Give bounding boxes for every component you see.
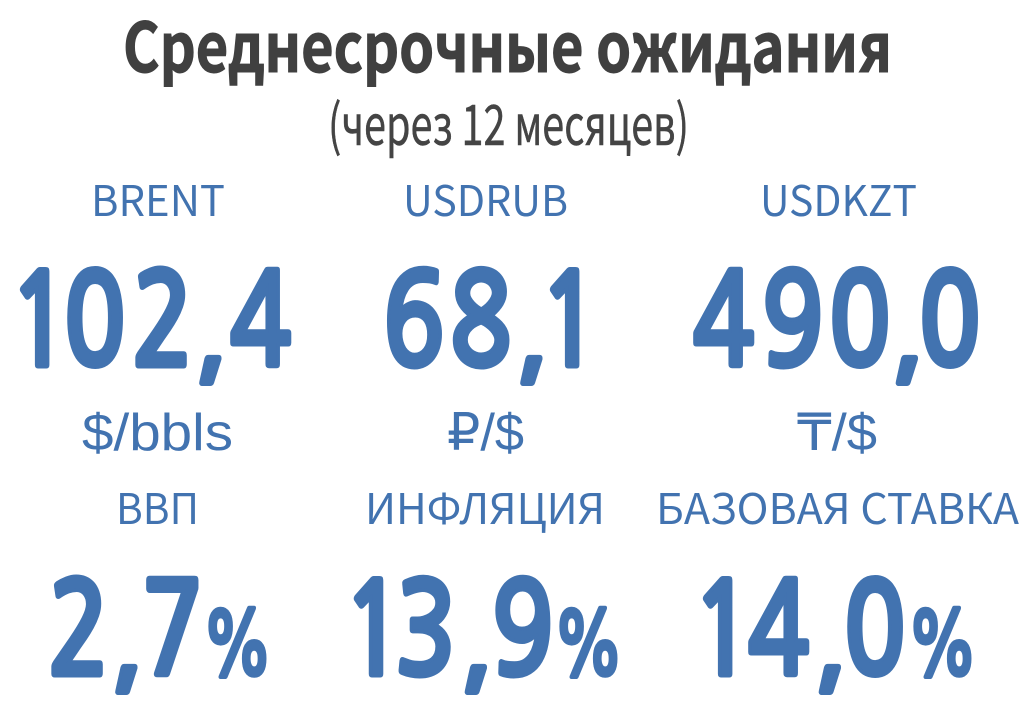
panel: ВВП <box>47 476 273 695</box>
label: ИНФЛЯЦИЯ: ИНФЛЯЦИЯ <box>365 476 605 537</box>
value: 14,0: 14,0 <box>691 569 907 695</box>
subtitle: (через 12 месяцев) <box>328 81 689 162</box>
percent sign: % <box>907 602 978 690</box>
label: USDRUB: USDRUB <box>403 168 568 229</box>
value: 13,9: 13,9 <box>342 569 555 695</box>
panel: USDKZT <box>692 168 982 462</box>
value: 68,1: 68,1 <box>382 260 602 386</box>
panel: ИНФЛЯЦИЯ <box>342 476 624 695</box>
label: ВВП: ВВП <box>116 476 199 537</box>
value: 102,4: 102,4 <box>8 260 293 386</box>
value: 2,7: 2,7 <box>47 569 205 695</box>
label: БАЗОВАЯ СТАВКА: БАЗОВАЯ СТАВКА <box>656 476 1019 537</box>
unit: rubles per dollar: ₽/$ <box>447 404 524 462</box>
unit: $/bbls: $/bbls <box>82 404 233 462</box>
percent sign: % <box>553 602 624 690</box>
panel: БАЗОВАЯ СТАВКА <box>656 476 1019 695</box>
unit: tenge per dollar: ₸/$ <box>797 404 877 462</box>
label: USDKZT: USDKZT <box>760 168 917 229</box>
panel: USDRUB <box>382 168 602 462</box>
percent sign: % <box>202 602 273 690</box>
value: 490,0: 490,0 <box>692 260 982 386</box>
label: BRENT: BRENT <box>91 168 225 229</box>
panel: BRENT <box>8 168 293 462</box>
